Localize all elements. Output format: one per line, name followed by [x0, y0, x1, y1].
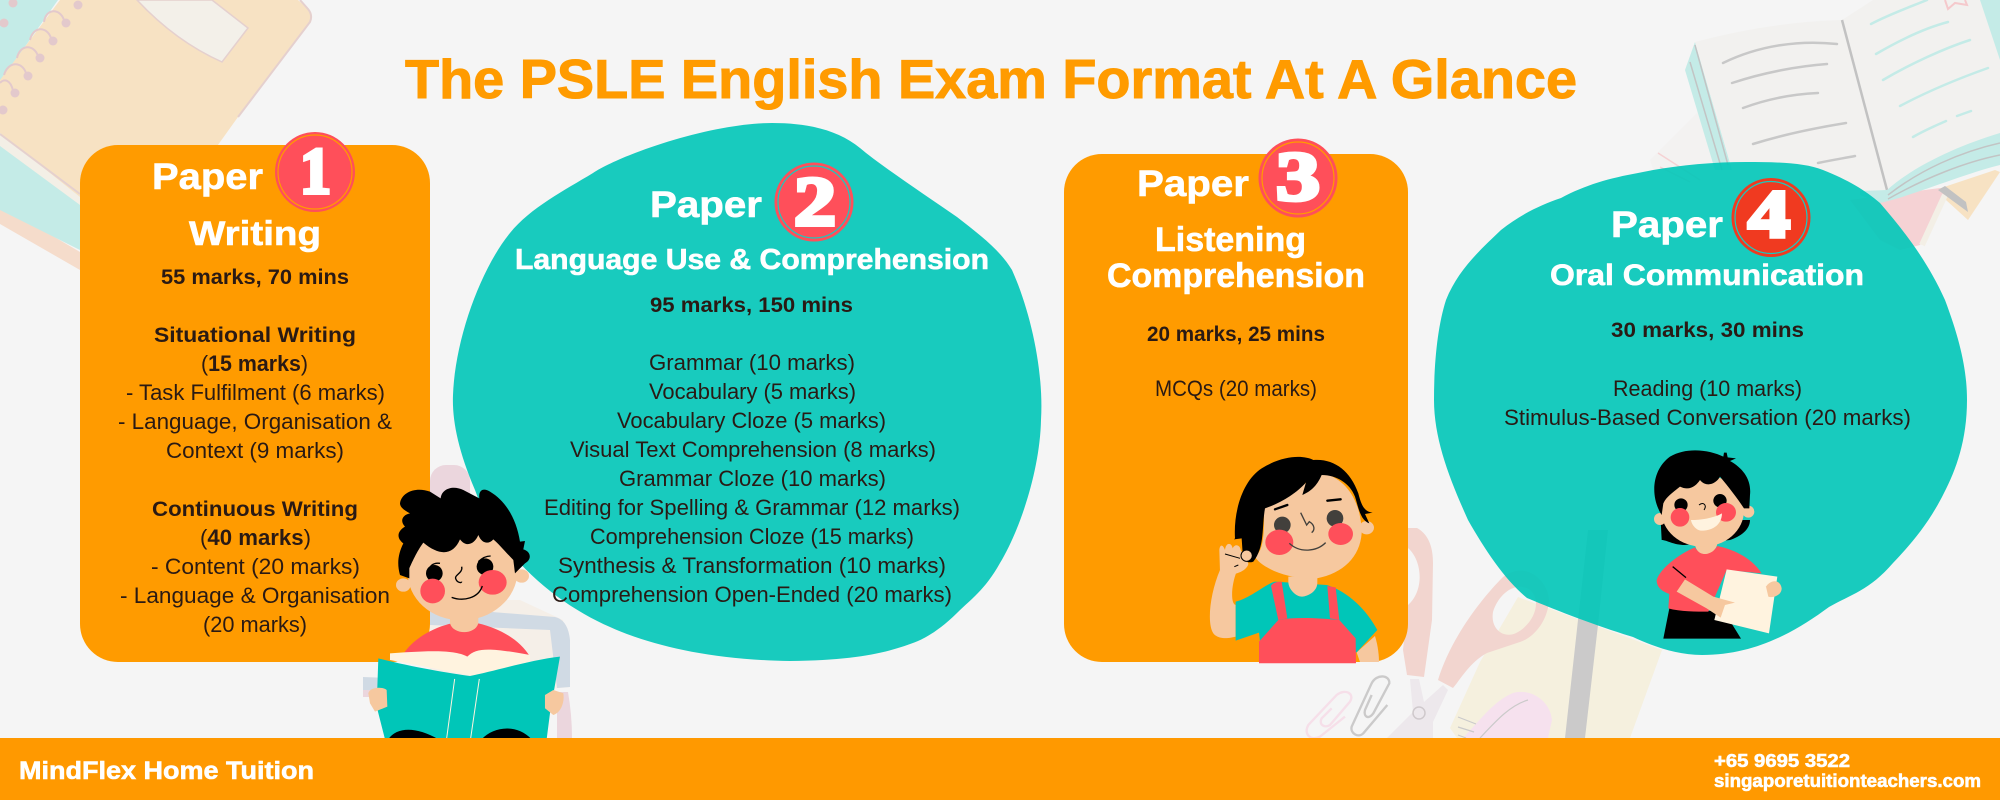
heading: paper 2: Paper: [650, 184, 762, 225]
text: component list: Grammar (10 marks): [649, 350, 855, 375]
text: continuous writing breakdown: Continuous Writing: [152, 498, 358, 521]
decoration: open book top right: [1650, 0, 2000, 250]
subheading: listening comprehension: [1107, 221, 1365, 295]
subheading: listening comprehension: Listening: [1155, 221, 1306, 259]
decoration: ruler, scissors, clips and eraser: [1307, 528, 1662, 738]
panel: paper 3 listening comprehension: [1064, 138, 1408, 662]
text: component list: Editing for Spelling & Grammar (12 marks): [544, 495, 960, 520]
badge: number 4: 4: [1748, 176, 1790, 252]
subheading: oral communication: Oral Communication: [1550, 259, 1864, 292]
text: continuous writing breakdown: (20 marks): [203, 612, 307, 637]
text: component list: Vocabulary (5 marks): [649, 379, 856, 404]
subheading: language use and comprehension: Language Use & Comprehension: [515, 244, 989, 276]
subheading: writing: Writing: [189, 215, 321, 253]
text: component list: Reading (10 marks): [1613, 376, 1802, 401]
text: component list: [544, 350, 960, 607]
badge: number 1: 1: [300, 135, 331, 208]
text: situational writing breakdown: [118, 324, 392, 463]
footer contact: singaporetuitionteachers.com: [1714, 770, 1981, 791]
badge: number 3: 3: [1276, 139, 1320, 216]
badge: number 2: [774, 162, 854, 242]
text: component list: Comprehension Open-Ended (20 marks): [552, 582, 952, 607]
text: component list: Comprehension Cloze (15 marks): [590, 524, 914, 549]
icon: pink paper clip: [1307, 692, 1351, 738]
marks and time: 30 marks, 30 mins: [1611, 319, 1804, 342]
text: situational writing breakdown: Context (9 marks): [166, 438, 344, 463]
text: component list: MCQs (20 marks): [1155, 376, 1317, 401]
heading: paper 1: Paper: [152, 156, 263, 197]
icon: grey paper clip: [1351, 676, 1389, 735]
badge: number 1: [275, 132, 355, 212]
panel: paper 1 writing: [80, 132, 430, 662]
text: component list: Synthesis & Transformation (10 marks): [558, 553, 946, 578]
badge: number 2: 2: [794, 164, 836, 241]
illustration: boy reading a book: [368, 488, 564, 739]
footer bar: [0, 738, 2000, 800]
panel: paper 4 oral communication: [1434, 162, 1967, 655]
decoration: notebook top left: [0, 0, 311, 270]
text: continuous writing breakdown: - Language & Organisation: [120, 583, 390, 608]
footer brand: MindFlex Home Tuition: [19, 757, 314, 785]
text: component list: Stimulus-Based Conversation (20 marks): [1504, 405, 1911, 430]
text: component list: [1504, 376, 1911, 430]
decoration: chair behind boy: [363, 465, 572, 738]
title: The PSLE English Exam Format At A Glance: [405, 48, 1577, 110]
badge: number 4: [1732, 176, 1810, 257]
footer contact: +65 9695 3522: [1714, 750, 1850, 771]
text: continuous writing breakdown: - Content (20 marks): [151, 554, 360, 579]
text: situational writing breakdown: Situational Writing: [154, 324, 356, 347]
illustration: child listening with hand at ear: [1210, 457, 1379, 663]
subheading: listening comprehension: Comprehension: [1107, 257, 1365, 295]
badge: number 3: [1258, 138, 1338, 218]
text: situational writing breakdown: (15 marks): [201, 351, 308, 376]
heading: paper 4: Paper: [1611, 204, 1723, 245]
text: continuous writing breakdown: [120, 498, 390, 637]
panel: paper 2 language use and comprehension: [453, 123, 1041, 661]
marks and time: 55 marks, 70 mins: [161, 266, 349, 289]
text: situational writing breakdown: - Language, Organisation &: [118, 409, 392, 434]
text: component list: Vocabulary Cloze (5 marks): [617, 408, 886, 433]
marks and time: 95 marks, 150 mins: [650, 294, 853, 317]
heading: paper 3: Paper: [1137, 163, 1249, 204]
text: component list: Grammar Cloze (10 marks): [619, 466, 886, 491]
footer contact: [1714, 750, 1981, 791]
illustration: child holding paper and pen: [1654, 450, 1782, 639]
text: component list: Visual Text Comprehension (8 marks): [570, 437, 936, 462]
text: situational writing breakdown: - Task Fulfilment (6 marks): [126, 380, 385, 405]
marks and time: 20 marks, 25 mins: [1147, 323, 1325, 346]
text: continuous writing breakdown: (40 marks): [200, 525, 311, 550]
